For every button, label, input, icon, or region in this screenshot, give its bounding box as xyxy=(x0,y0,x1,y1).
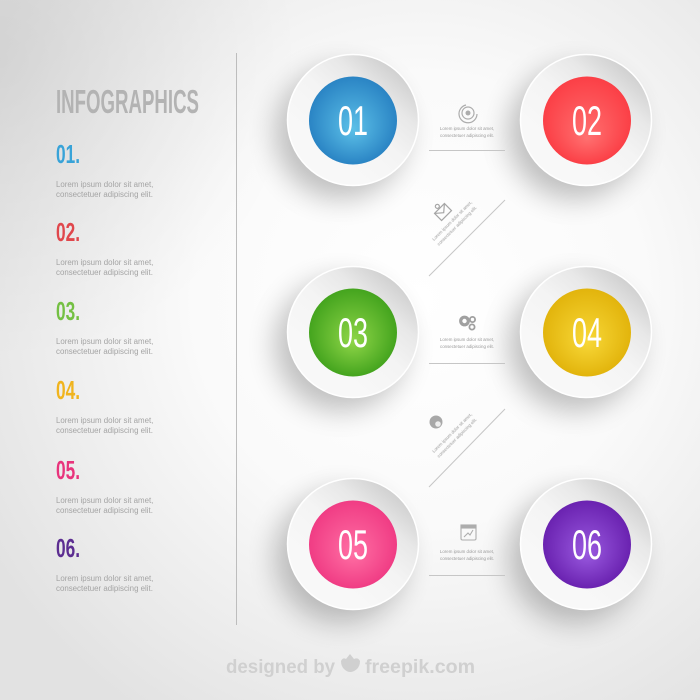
list item 02: consectetuer adipiscing elit. xyxy=(56,268,153,277)
list item 05: Lorem ipsum dolor sit amet, xyxy=(56,496,153,505)
list item 06 xyxy=(56,533,153,593)
list item 03: 03. xyxy=(56,296,80,326)
connector 03-04: consectetuer adipiscing elit. xyxy=(440,344,494,349)
list item 02: 02. xyxy=(56,217,80,247)
list item 02: Lorem ipsum dolor sit amet, xyxy=(56,258,153,267)
list item 05 xyxy=(56,455,153,515)
list item 04: 04. xyxy=(56,375,80,405)
list item 03: Lorem ipsum dolor sit amet, xyxy=(56,337,153,346)
list item 06: consectetuer adipiscing elit. xyxy=(56,584,153,593)
circle 03 xyxy=(275,266,418,411)
circle 04 xyxy=(508,266,652,411)
circle 06: 06 xyxy=(572,521,602,568)
connector 05-06: Lorem ipsum dolor sit amet, xyxy=(440,549,494,554)
list item 06: Lorem ipsum dolor sit amet, xyxy=(56,574,153,583)
footer credit: designed by xyxy=(226,657,335,678)
list item 01 xyxy=(56,139,153,199)
vertical divider xyxy=(236,53,238,625)
connector 01-02: Lorem ipsum dolor sit amet, xyxy=(440,126,494,131)
circle 04: 04 xyxy=(572,309,602,356)
circle 01: 01 xyxy=(338,97,368,144)
connector 01-02 xyxy=(429,105,505,150)
list item 03 xyxy=(56,296,153,356)
connector 02-03 diagonal xyxy=(429,200,505,276)
circle 05 xyxy=(275,478,418,623)
connector 03-04 xyxy=(429,317,505,364)
connector 02-03 diagonal: Lorem ipsum dolor sit amet, xyxy=(431,200,473,242)
icon: freepik mascot xyxy=(341,654,360,672)
title: INFOGRAPHICS xyxy=(56,83,199,120)
connector 01-02: consectetuer adipiscing elit. xyxy=(440,133,494,138)
list item 04: consectetuer adipiscing elit. xyxy=(56,426,153,435)
footer credit xyxy=(226,654,475,678)
circle 03: 03 xyxy=(338,309,368,356)
connector 04-05 diagonal: Lorem ipsum dolor sit amet, xyxy=(431,412,473,454)
icon: support head xyxy=(430,416,442,428)
connector 02-03 diagonal: consectetuer adipiscing elit. xyxy=(436,205,478,247)
circle 01 xyxy=(275,54,418,199)
connector 05-06: consectetuer adipiscing elit. xyxy=(440,556,494,561)
list item 05: consectetuer adipiscing elit. xyxy=(56,506,153,515)
list item 04: Lorem ipsum dolor sit amet, xyxy=(56,416,153,425)
connector 03-04: Lorem ipsum dolor sit amet, xyxy=(440,337,494,342)
icon: gears xyxy=(461,317,475,330)
list item 03: consectetuer adipiscing elit. xyxy=(56,347,153,356)
footer credit: freepik.com xyxy=(365,657,475,678)
list item 01: consectetuer adipiscing elit. xyxy=(56,190,153,199)
list item 06: 06. xyxy=(56,533,80,563)
icon: chart calendar xyxy=(461,525,476,540)
icon: envelope xyxy=(431,200,451,220)
connector 05-06 xyxy=(429,525,505,576)
circle 05: 05 xyxy=(338,521,368,568)
list item 05: 05. xyxy=(56,455,80,485)
list item 04 xyxy=(56,375,153,435)
circle 06 xyxy=(508,478,652,623)
circle 02 xyxy=(508,54,652,199)
connector 04-05 diagonal: consectetuer adipiscing elit. xyxy=(436,417,478,459)
list item 01: 01. xyxy=(56,139,80,169)
circle 02: 02 xyxy=(572,97,602,144)
list item 01: Lorem ipsum dolor sit amet, xyxy=(56,180,153,189)
list item 02 xyxy=(56,217,153,277)
connector 04-05 diagonal xyxy=(429,409,505,487)
icon: user target xyxy=(459,105,477,123)
